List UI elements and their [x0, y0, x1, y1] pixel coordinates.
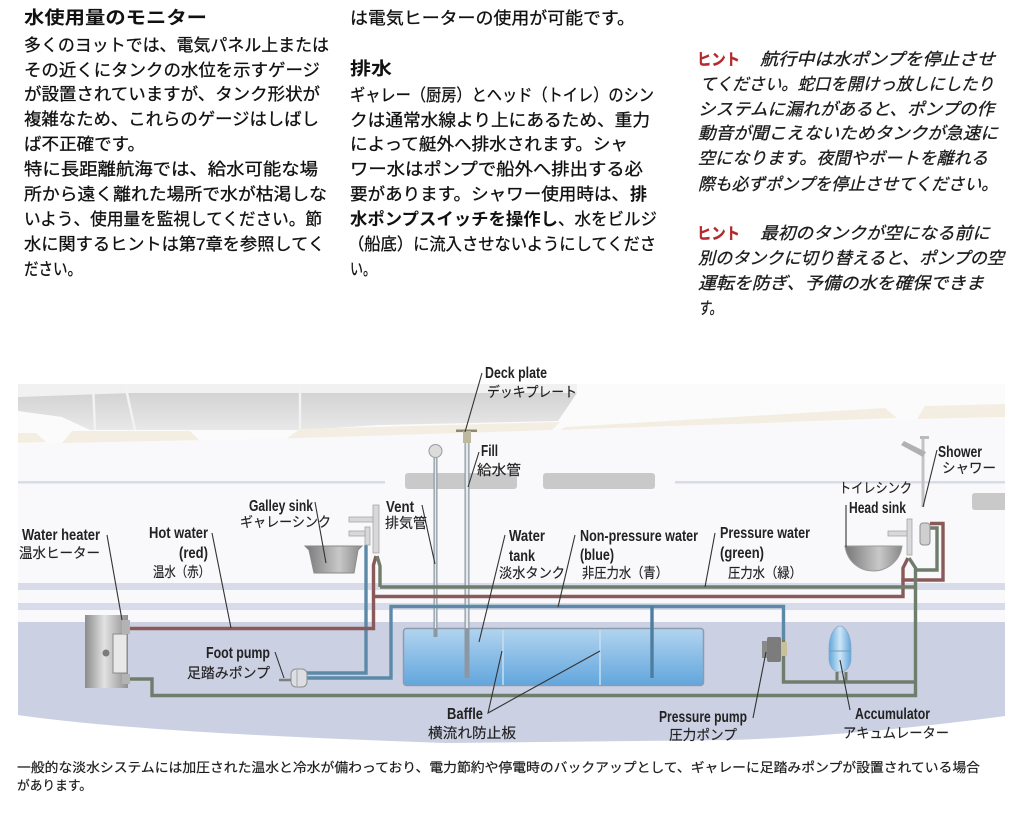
body text: electric heater continuation: は電気ヒーターの使用が可能です。 — [350, 8, 635, 28]
label: water tank: tank — [509, 548, 535, 565]
label: hot water: (red) — [179, 545, 208, 562]
callout: tip two — [697, 224, 1006, 318]
label: hot water: 温水（赤） — [153, 564, 210, 580]
body text: drainage — [348, 86, 657, 279]
faucets — [349, 505, 379, 553]
windows — [405, 473, 1005, 510]
label: hot water — [149, 525, 231, 628]
label: deck plate — [465, 365, 577, 432]
text column: drainage — [348, 8, 657, 279]
callout: tip one: 航行中は水ポンプを停止させ — [760, 50, 997, 69]
label: pressure water — [705, 525, 810, 587]
callout: tip one: システムに漏れがあると、ポンプの作 — [698, 100, 997, 119]
cabin top — [18, 384, 1005, 450]
body text: water monitoring: 水に関するヒントは第7章を参照してく — [24, 235, 325, 254]
body text: drainage: （船底）に流入させないようにしてくださ — [348, 235, 656, 254]
body text: drainage: 、水をビルジ — [558, 210, 657, 229]
label: pressure pump: Pressure pump — [659, 709, 747, 726]
callout: tip two: 最初のタンクが空になる前に — [760, 224, 991, 243]
body text: drainage: ワー水はポンプで船外へ排出する必 — [350, 160, 643, 179]
body text: drainage: 排 — [630, 185, 647, 204]
label: vent: 排気管 — [385, 515, 427, 531]
label: fill: Fill — [481, 443, 498, 460]
label: water heater: 温水ヒーター — [19, 545, 100, 561]
label: baffle: 横流れ防止板 — [428, 725, 516, 741]
hull — [18, 417, 1005, 622]
label: non-pressure water: 非圧力水（青） — [582, 565, 668, 581]
label: head sink — [839, 480, 912, 547]
label: foot pump: 足踏みポンプ — [187, 665, 270, 681]
body text: water monitoring: その近くにタンクの水位を示すゲージ — [24, 61, 320, 80]
icon: pressure pump — [762, 637, 787, 662]
caption — [17, 760, 980, 793]
boat background — [18, 384, 1005, 743]
label: water tank — [479, 528, 565, 642]
baffles — [503, 630, 600, 685]
body text: water monitoring: が設置されていますが、タンク形状が — [24, 85, 320, 104]
label: water tank: 淡水タンク — [499, 565, 565, 581]
label: vent: Vent — [386, 499, 415, 516]
body text: drainage: 水ポンプスイッチを操作し — [350, 209, 558, 229]
label: galley sink — [240, 498, 331, 563]
label: head sink: Head sink — [849, 500, 906, 517]
label: accumulator — [840, 660, 949, 741]
icon: galley sink — [305, 505, 379, 573]
icon: shower — [901, 436, 930, 545]
body text: drainage: 要があります。シャワー使用時は、 — [350, 184, 629, 204]
callout: tip two: 別のタンクに切り替えると、ポンプの空 — [698, 249, 1006, 268]
label: foot pump: Foot pump — [206, 645, 270, 662]
pipe: fill with deck plate — [456, 430, 477, 678]
label: pressure water: (green) — [720, 545, 764, 562]
body text: water monitoring: 複雑なため、これらのゲージはしばし — [24, 110, 319, 129]
body text: water monitoring: ださい。 — [24, 260, 82, 279]
water tank — [404, 628, 704, 686]
icon: accumulator — [829, 626, 851, 682]
label: baffle — [428, 651, 600, 741]
label: pressure pump: 圧力ポンプ — [669, 727, 737, 743]
pipes: pressure water (green) — [128, 528, 937, 696]
callout: tip one: 空になります。夜間やボートを離れる — [698, 149, 988, 168]
callout: tip two: 運転を防ぎ、予備の水を確保できま — [698, 274, 985, 293]
body text: drainage: クは通常水線より上にあるため、重力 — [350, 111, 650, 130]
label: pressure water: 圧力水（緑） — [728, 565, 802, 581]
body text: drainage: い。 — [350, 260, 376, 279]
hull stripes — [18, 481, 1005, 610]
pipes: non-pressure water (blue) — [305, 545, 784, 678]
body text: drainage: ギャレー（厨房）とヘッド（トイレ）のシン — [350, 86, 654, 105]
callout: tip one: ヒント — [697, 52, 740, 69]
label: accumulator: Accumulator — [855, 706, 930, 723]
caption: 一般的な淡水システムには加圧された温水と冷水が備わっており、電力節約や停電時のバックアップとして、ギャレーに足踏みポンプが設置されている場合 — [17, 760, 980, 775]
icon: water heater — [85, 615, 130, 688]
body text: drainage: によって艇外へ排水されます。シャ — [350, 135, 628, 154]
callout: tip two: ヒント — [697, 226, 740, 243]
body text: water monitoring: いよう、使用量を監視してください。節 — [24, 209, 322, 229]
heading: drainage: 排水 — [350, 59, 392, 79]
callout: tip one: てください。蛇口を開けっ放しにしたり — [700, 75, 994, 94]
body text: water monitoring: 多くのヨットでは、電気パネル上または — [24, 36, 329, 55]
text column: water usage monitoring — [24, 8, 329, 279]
label: fill — [468, 443, 521, 487]
heading: water monitoring: 水使用量のモニター — [24, 8, 207, 28]
label: baffle: Baffle — [447, 706, 483, 723]
label: non-pressure water: Non-pressure water — [580, 528, 698, 545]
icon: head sink — [845, 519, 912, 571]
body text: water monitoring: 特に長距離航海では、給水可能な場 — [24, 160, 318, 179]
label: foot pump — [187, 645, 284, 681]
callout: tip one — [697, 50, 999, 194]
callout: tip one: 際も必ずポンプを停止させてください。 — [698, 175, 998, 194]
label: shower: Shower — [938, 444, 982, 461]
callout: tip two: す。 — [698, 299, 722, 318]
label: shower — [923, 444, 996, 507]
body text: water monitoring: ば不正確です。 — [24, 135, 145, 154]
label: deck plate: デッキプレート — [487, 384, 577, 400]
label: accumulator: アキュムレーター — [843, 725, 949, 741]
label: head sink: トイレシンク — [839, 480, 912, 496]
label: fill: 給水管 — [477, 462, 521, 478]
lower hull — [18, 622, 1005, 743]
label: water heater: Water heater — [22, 527, 100, 544]
label: non-pressure water: (blue) — [580, 547, 614, 564]
label: hot water: Hot water — [149, 525, 208, 542]
callout: tip one: 動音が聞こえないためタンクが急速に — [698, 124, 999, 143]
deck beige pads — [18, 404, 1005, 443]
label: pressure water: Pressure water — [720, 525, 810, 542]
label: pressure pump — [659, 652, 766, 743]
label: deck plate: Deck plate — [485, 365, 547, 382]
label: galley sink: Galley sink — [249, 498, 313, 515]
icon: foot pump — [279, 669, 307, 687]
label: water tank: Water — [509, 528, 545, 545]
caption: があります。 — [17, 778, 92, 793]
body text: water monitoring — [24, 36, 329, 279]
label: water heater — [19, 527, 122, 620]
label: non-pressure water — [558, 528, 698, 607]
label: vent — [385, 499, 435, 564]
label: galley sink: ギャレーシンク — [240, 514, 331, 530]
label: shower: シャワー — [942, 460, 996, 476]
pipe: vent — [429, 444, 442, 637]
pipes: hot water (red) — [128, 524, 943, 628]
body text: water monitoring: 所から遠く離れた場所で水が枯渇しな — [24, 185, 327, 204]
